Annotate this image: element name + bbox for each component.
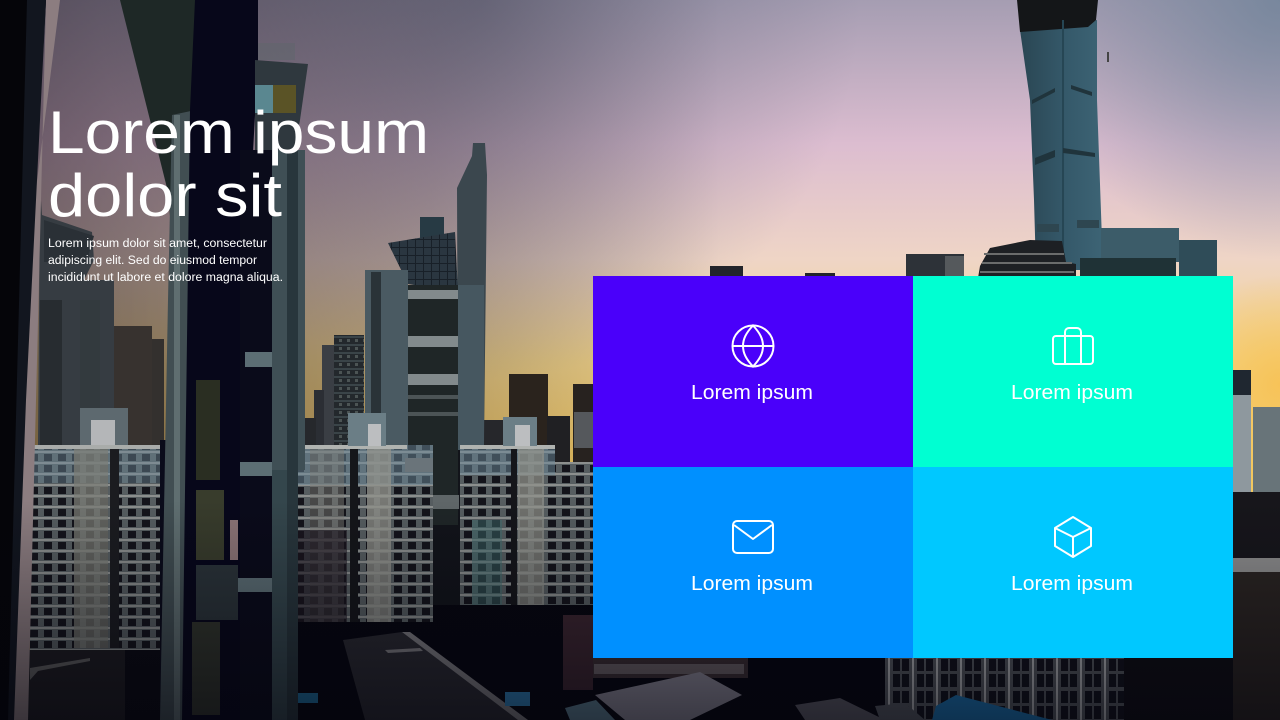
label: Lorem ipsum (1011, 573, 1133, 595)
foreground rooftops (293, 605, 1233, 720)
description text: Lorem ipsum dolor sit amet, consectetur (48, 238, 267, 250)
title: dolor sit (48, 162, 282, 229)
panel: bottom-left blue tile (593, 467, 913, 658)
panel: bottom-right cyan tile (913, 467, 1233, 658)
tall glass tower (1017, 0, 1109, 270)
icon: globe (732, 326, 774, 366)
right side buildings (1233, 370, 1280, 720)
icon: envelope (733, 521, 773, 553)
title (48, 99, 429, 229)
panel: top-left purple tile (593, 276, 913, 467)
label: Lorem ipsum (1011, 382, 1133, 404)
far towers centre (296, 335, 593, 466)
low skyline behind the panel (710, 254, 964, 278)
foreground window frame and near tower (0, 0, 308, 720)
label: Lorem ipsum (691, 573, 813, 595)
description text (48, 238, 283, 284)
apartment block left (28, 445, 165, 720)
description text: incididunt ut labore et dolore magna aliqua. (48, 272, 283, 284)
description text: adipiscing elit. Sed do eiusmod tempor (48, 255, 257, 267)
apartment block right (460, 417, 593, 622)
label: Lorem ipsum (691, 382, 813, 404)
panel: top-right mint tile (913, 276, 1233, 467)
title: Lorem ipsum (48, 99, 429, 166)
low buildings beside the tower (978, 228, 1217, 278)
icon: briefcase (1053, 328, 1093, 364)
apartment block centre (297, 413, 433, 640)
icon: cube (1055, 517, 1091, 557)
left reflected buildings (38, 186, 164, 451)
tower with slanted roof (365, 143, 487, 622)
